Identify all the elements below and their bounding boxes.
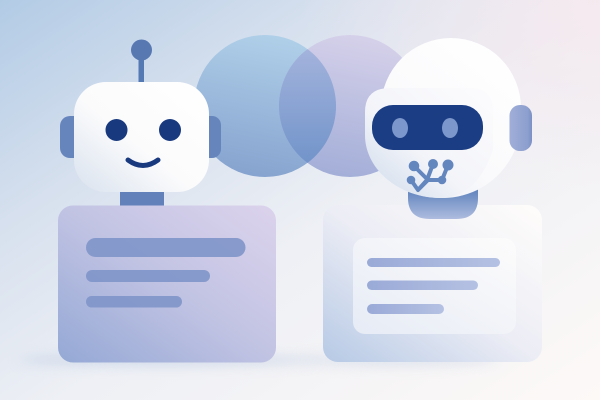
shadow: left card — [17, 354, 317, 366]
right ear — [199, 116, 221, 158]
text bar: medium — [367, 280, 478, 290]
neck — [120, 190, 164, 207]
antenna — [131, 40, 152, 83]
shadow: right card — [300, 354, 500, 366]
text bar: short — [86, 296, 182, 308]
text bar: long — [86, 238, 246, 257]
left ear — [60, 116, 84, 158]
right ear — [510, 105, 532, 151]
right robot — [365, 38, 532, 219]
circle: blue — [194, 35, 336, 177]
text bar: short — [367, 304, 444, 314]
left eye — [106, 119, 128, 141]
neck — [408, 188, 478, 219]
text bar: long — [367, 258, 500, 267]
head — [370, 38, 521, 198]
panel: right card — [323, 205, 542, 362]
panel: left card — [58, 206, 276, 362]
visor — [372, 105, 483, 150]
overlapping circles — [194, 35, 421, 177]
circle overlap — [279, 49, 336, 163]
right visor eye — [442, 118, 458, 138]
left visor eye — [392, 118, 408, 138]
circle: lavender — [279, 35, 421, 177]
inner panel — [353, 238, 516, 334]
left robot — [60, 40, 221, 207]
smile — [128, 160, 158, 166]
circuit icon — [407, 160, 453, 190]
head — [74, 82, 209, 192]
face plate — [365, 88, 493, 198]
text bar: medium — [86, 270, 210, 282]
right eye — [159, 119, 181, 141]
